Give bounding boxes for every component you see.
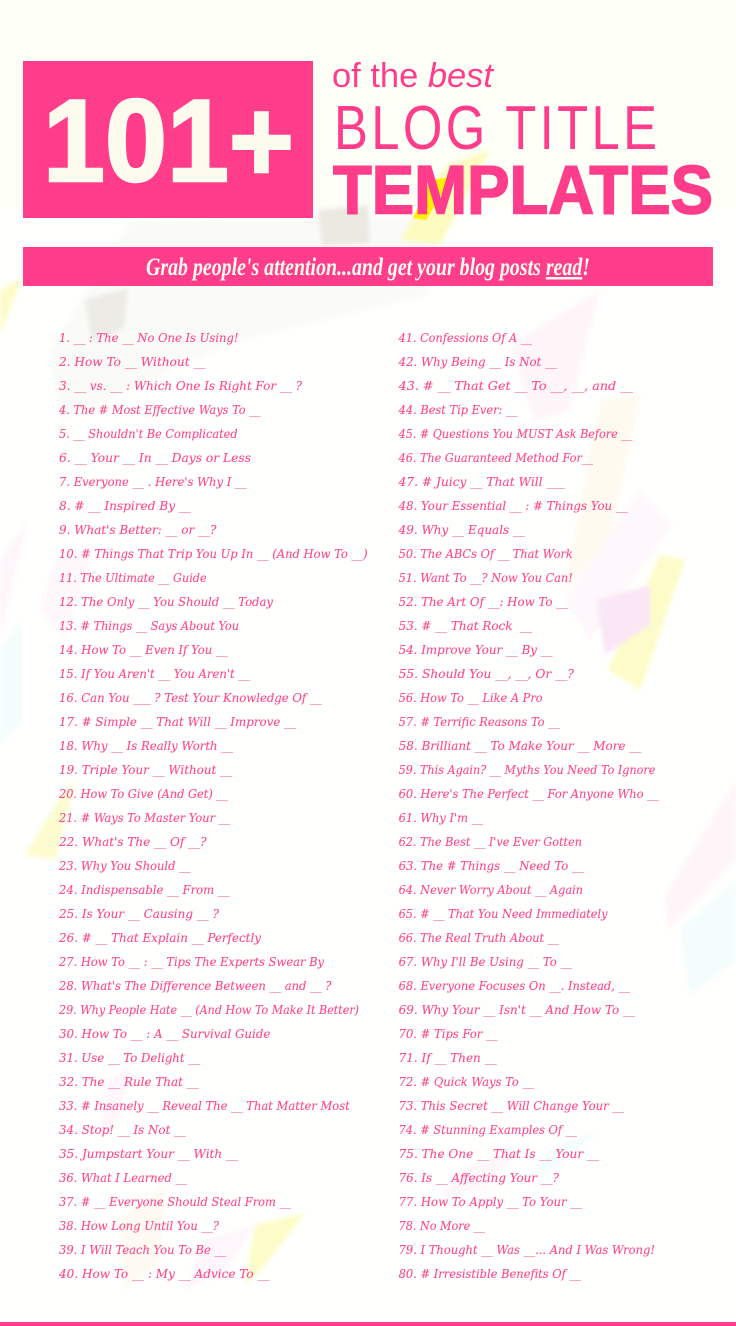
template list: right column: 53. # __ That Rock __ [399,619,532,633]
template list: right column: 71. If __ Then __ [399,1051,497,1065]
template list: right column: 67. Why I'll Be Using __ To __ [399,955,572,969]
template list: left column: 24. Indispensable __ From __ [58,883,230,897]
template list: right column: 65. # __ That You Need Immediately [399,907,608,921]
template list: right column: 79. I Thought __ Was __... And I Was Wrong! [399,1243,655,1257]
template list: left column: 5. __ Shouldn't Be Complicated [59,427,238,441]
template list: left column: 8. # __ Inspired By __ [59,499,191,513]
template list: left column: 32. The __ Rule That __ [59,1075,199,1089]
template list: right column: 49. Why __ Equals __ [398,523,525,537]
template list: right column: 58. Brilliant __ To Make Your __ More __ [399,739,641,753]
template list: left column: 34. Stop! __ Is Not __ [59,1123,186,1137]
template list: right column: 69. Why Your __ Isn't __ And How To __ [399,1003,635,1017]
template list: right column: 77. How To Apply __ To Your __ [399,1195,582,1209]
template list: left column: 2. How To __ Without __ [58,355,206,369]
template list: left column: 1. __ : The __ No One Is Using! [59,331,238,345]
template list: right column: 63. The # Things __ Need To __ [399,859,584,873]
template list: right column: 70. # Tips For __ [399,1027,498,1041]
template list: left column: 19. Triple Your __ Without __ [59,763,232,777]
tagline: Grab people's attention...and get your blog posts read! [146,254,590,281]
template list: right column: 64. Never Worry About __ Again [399,883,583,897]
title line: templates: TEMPLATES [333,152,713,228]
template list: left column: 30. How To __ : A __ Survival Guide [59,1027,270,1041]
template list: right column [398,331,659,1281]
template list: right column: 51. Want To __? Now You Can! [399,571,573,585]
template list: right column: 62. The Best __ I've Ever Gotten [399,835,582,849]
template list: right column: 42. Why Being __ Is Not __ [398,355,557,369]
big number: 101+ [43,75,294,206]
template list: left column: 27. How To __ : __ Tips The Experts Swear By [58,955,324,969]
template list: right column: 56. How To __ Like A Pro [399,691,543,705]
template list: right column: 52. The Art Of __: How To __ [399,595,568,609]
template list: right column: 47. # Juicy __ That Will ___ [398,475,565,489]
template list: right column: 80. # Irresistible Benefits Of __ [399,1267,581,1281]
template list: left column: 33. # Insanely __ Reveal The __ That Matter Most [59,1099,350,1113]
template list: right column: 43. # __ That Get __ To __, __, and __ [398,379,633,393]
template list: left column: 38. How Long Until You __? [59,1219,220,1233]
template list: left column: 20. How To Give (And Get) __ [58,787,228,801]
template list: left column: 9. What's Better: __ or __? [59,523,217,537]
template list: right column: 66. The Real Truth About __ [399,931,559,945]
template list: left column: 4. The # Most Effective Ways To __ [58,403,261,417]
template list: left column: 31. Use __ To Delight __ [59,1051,200,1065]
template list: left column: 23. Why You Should __ [58,859,191,873]
template list: right column: 73. This Secret __ Will Change Your __ [399,1099,624,1113]
template list: right column: 59. This Again? __ Myths You Need To Ignore [399,763,655,777]
template list: right column: 48. Your Essential __ : # Things You __ [398,499,628,513]
number panel [23,61,313,218]
template list: right column: 76. Is __ Affecting Your __? [399,1171,560,1185]
template list: left column: 35. Jumpstart Your __ With __ [59,1147,238,1161]
template list: right column: 60. Here's The Perfect __ For Anyone Who __ [399,787,659,801]
template list: left column: 14. How To __ Even If You __ [59,643,228,657]
template list: left column: 37. # __ Everyone Should Steal From __ [59,1195,291,1209]
tagline banner [23,247,713,286]
template list: left column: 21. # Ways To Master Your __ [58,811,230,825]
template list: right column: 57. # Terrific Reasons To __ [399,715,560,729]
template list: right column: 74. # Stunning Examples Of __ [399,1123,577,1137]
template list: left column [58,331,368,1281]
template list: right column: 54. Improve Your __ By __ [399,643,553,657]
template list: right column: 44. Best Tip Ever: __ [398,403,517,417]
template list: left column: 39. I Will Teach You To Be __ [59,1243,226,1257]
bottom bar [0,1322,736,1326]
subtitle: of the best [332,57,495,95]
template list: left column: 12. The Only __ You Should __ Today [59,595,273,609]
template list: left column: 13. # Things __ Says About You [59,619,239,633]
template list: left column: 10. # Things That Trip You Up In __ (And How To __) [59,547,368,561]
template list: right column: 68. Everyone Focuses On __. Instead, __ [399,979,630,993]
template list: left column: 7. Everyone __ . Here's Why I __ [59,475,247,489]
title [332,57,713,228]
template list: left column: 18. Why __ Is Really Worth __ [59,739,233,753]
template list: left column: 22. What's The __ Of __? [58,835,207,849]
template list: left column: 15. If You Aren't __ You Aren't __ [59,667,250,681]
template list: left column: 11. The Ultimate __ Guide [59,571,207,585]
template list: left column: 29. Why People Hate __ (And How To Make It Better) [58,1003,359,1017]
template list: left column: 6. __ Your __ In __ Days or Less [59,451,251,465]
template list: left column: 17. # Simple __ That Will __ Improve __ [59,715,296,729]
template list: right column: 78. No More __ [399,1219,485,1233]
template list: right column: 61. Why I'm __ [399,811,483,825]
template list: right column: 41. Confessions Of A __ [398,331,532,345]
template list: right column: 45. # Questions You MUST Ask Before __ [398,427,632,441]
template list: left column: 16. Can You ___ ? Test Your Knowledge Of __ [59,691,322,705]
template list: right column: 55. Should You __, __, Or __? [399,667,575,681]
template list: left column: 36. What I Learned __ [59,1171,187,1185]
template list: right column: 75. The One __ That Is __ Your __ [399,1147,599,1161]
template list: left column: 3. __ vs. __ : Which One Is Right For __ ? [59,379,303,393]
template list: right column: 50. The ABCs Of __ That Work [399,547,573,561]
template list: left column: 28. What's The Difference Between __ and __ ? [58,979,332,993]
template list: right column: 46. The Guaranteed Method For__ [398,451,593,465]
title line: blog title: BLOG TITLE [334,94,657,163]
template list: left column: 26. # __ That Explain __ Perfectly [58,931,261,945]
template list: left column: 25. Is Your __ Causing __ ? [58,907,220,921]
template list: left column: 40. How To __ : My __ Advice To __ [58,1267,270,1281]
template list: right column: 72. # Quick Ways To __ [399,1075,534,1089]
